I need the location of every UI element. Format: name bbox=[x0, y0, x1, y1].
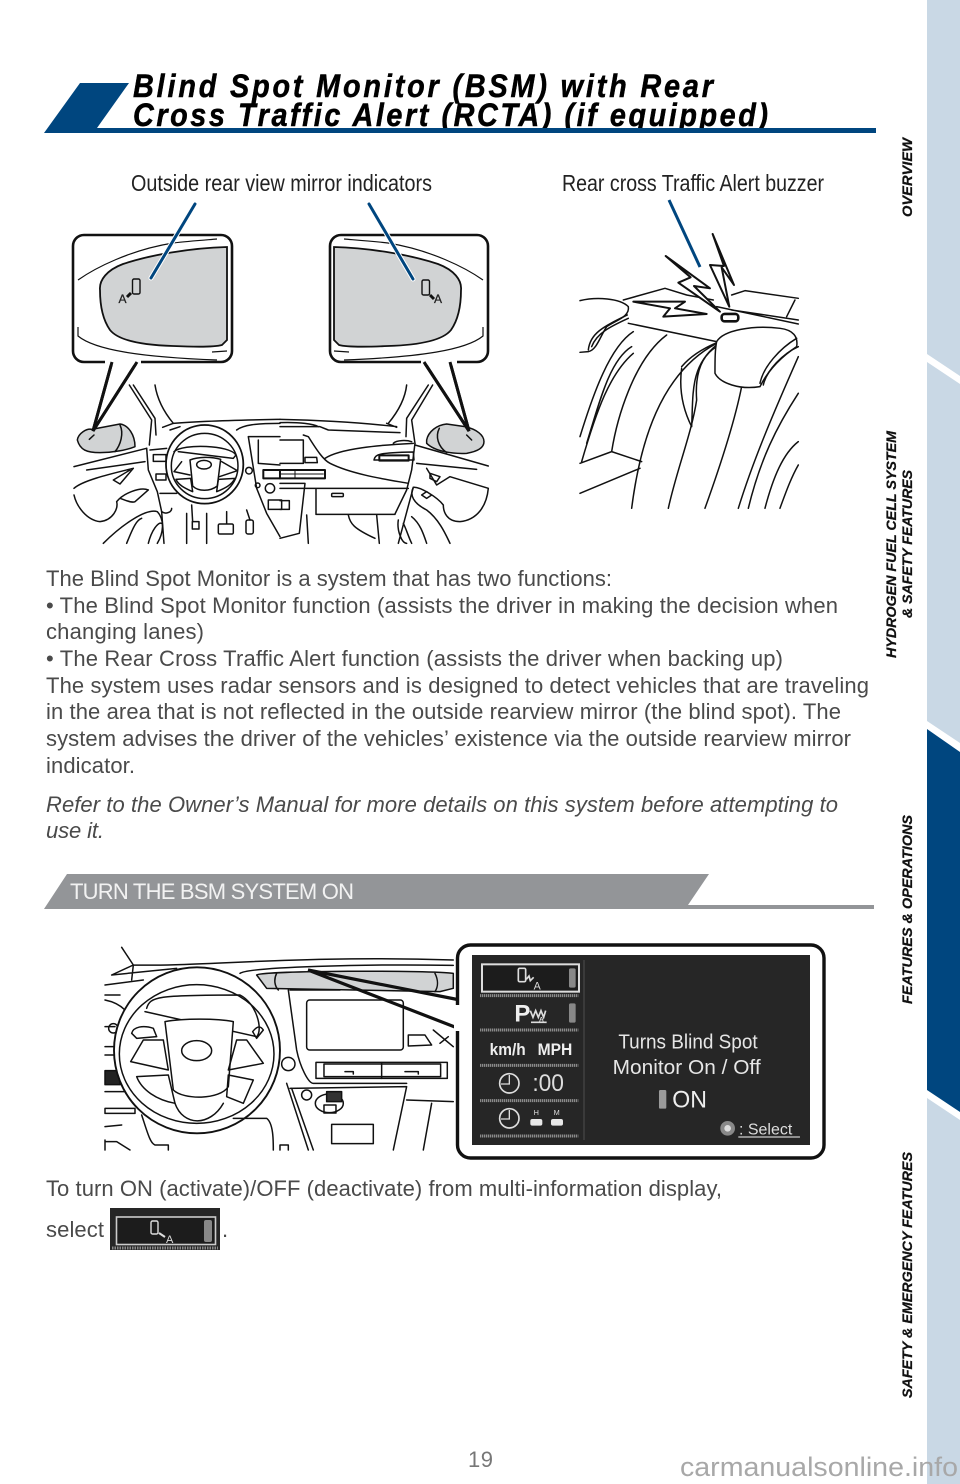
instruction: select bbox=[46, 1208, 228, 1250]
display contents: ON bbox=[672, 1087, 707, 1114]
display contents: M bbox=[554, 1108, 560, 1117]
callout: left mirror: A bbox=[118, 292, 127, 306]
instruction text: To turn ON (activate)/OFF (deactivate) from multi-information display, bbox=[46, 1176, 722, 1201]
callout: left mirror bbox=[73, 204, 232, 431]
body text: in the area that is not reflected in the outside rearview mirror (the blind spot). The bbox=[46, 699, 841, 724]
label: buzzer: Rear cross Traffic Alert buzzer bbox=[562, 170, 824, 196]
display contents: A bbox=[534, 980, 542, 992]
display contents: H bbox=[534, 1108, 539, 1117]
callout: right mirror: A bbox=[434, 292, 442, 306]
body text: system advises the driver of the vehicles’ existence via the outside rearview mirror bbox=[46, 726, 851, 751]
illustration: dashboard with cluster bbox=[105, 947, 453, 1150]
display contents: A bbox=[539, 1017, 544, 1024]
body text bbox=[46, 566, 869, 778]
italic note: use it. bbox=[46, 818, 104, 843]
callout pointer to display bbox=[308, 970, 460, 1029]
body text: • The Rear Cross Traffic Alert function (assists the driver when backing up) bbox=[46, 646, 783, 671]
title: Cross Traffic Alert (RCTA) (if equipped) bbox=[133, 98, 768, 133]
italic note bbox=[46, 792, 838, 843]
body text: The system uses radar sensors and is designed to detect vehicles that are traveling bbox=[46, 673, 869, 698]
illustration: car interior with mirror callouts bbox=[73, 204, 488, 543]
display contents bbox=[480, 960, 800, 1140]
instruction: select: select bbox=[46, 1217, 104, 1242]
display contents: P bbox=[514, 1001, 530, 1028]
sidebar navigation tabs: FEATURES & OPERATIONS bbox=[899, 814, 915, 1004]
callout: right mirror bbox=[330, 204, 488, 431]
display contents: Turns Blind Spot bbox=[618, 1030, 758, 1053]
display contents: Monitor On / Off bbox=[613, 1056, 761, 1079]
page number: 19 bbox=[468, 1447, 493, 1472]
sidebar navigation tabs: HYDROGEN FUEL CELL SYSTEM bbox=[883, 431, 899, 658]
section banner: TURN THE BSM SYSTEM ON bbox=[70, 879, 354, 904]
body text: • The Blind Spot Monitor function (assists the driver in making the decision when bbox=[46, 593, 838, 618]
sidebar navigation tabs: OVERVIEW bbox=[899, 136, 915, 217]
display contents: MPH bbox=[538, 1040, 572, 1059]
sidebar navigation tabs: SAFETY & EMERGENCY FEATURES bbox=[899, 1151, 915, 1398]
title bbox=[44, 69, 876, 133]
dashboard right half bbox=[280, 385, 488, 543]
instruction: select: . bbox=[222, 1217, 228, 1242]
watermark: carmanualsonline.info bbox=[680, 1452, 958, 1482]
body text: changing lanes) bbox=[46, 619, 204, 644]
illustration: rear seat with buzzer bbox=[580, 234, 798, 508]
icon: BSM menu item bbox=[110, 1208, 220, 1250]
icon: BSM menu item: A bbox=[166, 1234, 174, 1246]
sidebar navigation tabs: & SAFETY FEATURES bbox=[899, 469, 915, 618]
leader line: buzzer bbox=[669, 200, 700, 267]
title: Blind Spot Monitor (BSM) with Rear bbox=[133, 69, 715, 104]
body text: The Blind Spot Monitor is a system that has two functions: bbox=[46, 566, 612, 591]
section banner bbox=[44, 874, 874, 909]
display contents: km/h bbox=[490, 1040, 526, 1059]
display contents: : Select bbox=[739, 1121, 793, 1138]
italic note: Refer to the Owner’s Manual for more details on this system before attempting to bbox=[46, 792, 838, 817]
label: mirror indicators: Outside rear view mirror indicators bbox=[131, 170, 432, 196]
multi-information display callout bbox=[454, 945, 824, 1158]
display contents: :00 bbox=[532, 1070, 564, 1097]
sidebar navigation tabs bbox=[883, 0, 960, 1484]
dashboard left half bbox=[74, 385, 282, 543]
body text: indicator. bbox=[46, 753, 135, 778]
